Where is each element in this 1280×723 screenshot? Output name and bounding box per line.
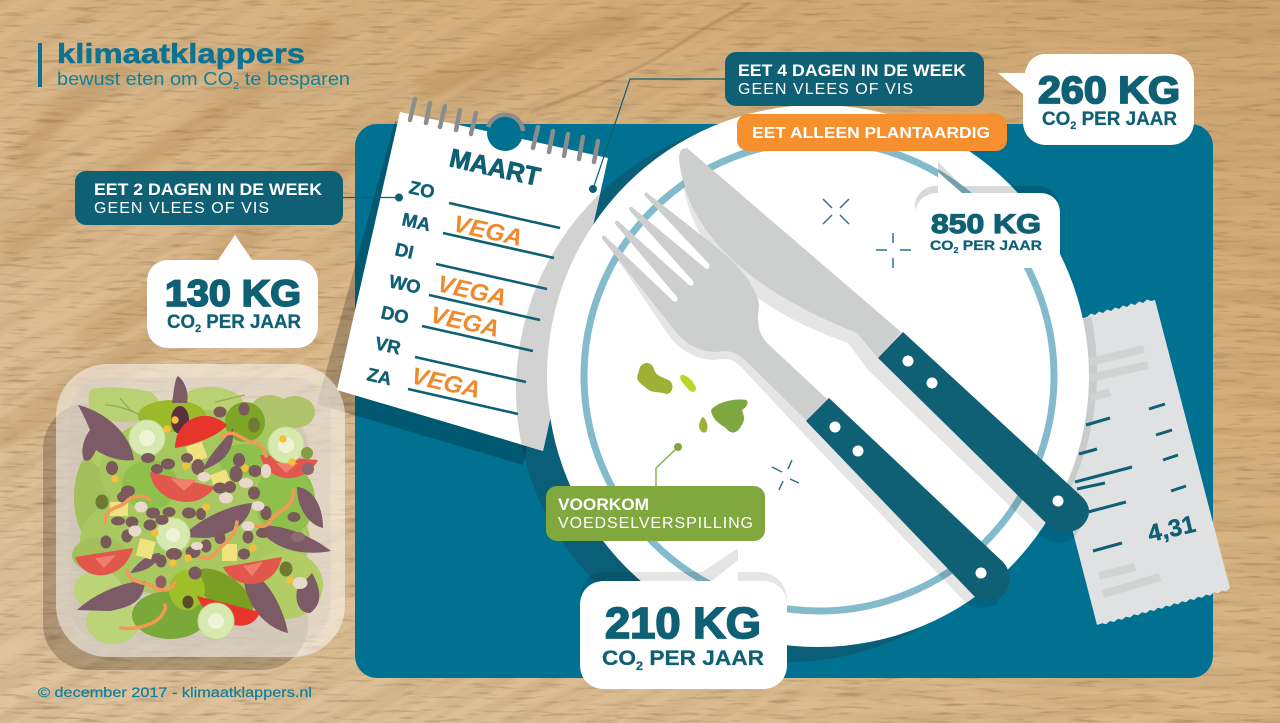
calendar lines: [408, 203, 560, 414]
label: 4 days: GEEN VLEES OF VIS: [738, 81, 913, 98]
weekday list: DO: [379, 301, 411, 328]
label: food waste: VOORKOM: [558, 496, 649, 514]
container lid highlight: [56, 364, 345, 657]
title: klimaatklappers: [57, 38, 305, 69]
tomato flesh detail: [95, 463, 298, 576]
vega notes: VEGA: [409, 362, 483, 404]
callout: 210 kg: PER JAAR: [643, 646, 764, 670]
weekday list: WO: [387, 270, 423, 298]
callout: 850 kg: CO: [930, 237, 951, 253]
tomatoes: [75, 416, 318, 626]
vega notes: VEGA: [435, 270, 509, 312]
callout: 130 kg: 130 KG: [165, 273, 301, 314]
corn: [111, 416, 296, 584]
label: food waste: VOEDSELVERSPILLING: [558, 515, 753, 532]
callout: 260 kg: CO: [1042, 109, 1070, 130]
callout: 850 kg: 850 KG: [931, 209, 1041, 239]
white beans: [128, 464, 308, 589]
cucumber seeds: [139, 430, 294, 629]
knife handle: [878, 332, 1089, 532]
beans: [96, 402, 314, 608]
callout: 210 kg: [580, 548, 787, 689]
fork handle: [806, 398, 1010, 601]
weekday list: MA: [400, 208, 433, 235]
subtitle: bewust eten om CO: [57, 69, 216, 89]
avocado cubes: [110, 441, 237, 561]
weekday list: ZO: [407, 176, 437, 202]
receipt total: 4,31: [1145, 511, 1198, 548]
knife: [679, 148, 1089, 532]
callout: 130 kg: [147, 235, 318, 348]
label: plant based: EET ALLEEN PLANTAARDIG: [752, 125, 990, 142]
footer credit: © december 2017 - klimaatklappers.nl: [38, 684, 312, 700]
vega notes: VEGA: [451, 210, 525, 252]
leaf veins: [105, 395, 245, 420]
weekday list: [365, 176, 437, 389]
plate shadow on placemat: [522, 134, 924, 662]
callout: 260 kg: PER JAAR: [1076, 109, 1177, 130]
callout: 130 kg: PER JAAR: [201, 312, 301, 333]
carrot strands: [105, 433, 293, 628]
callout: 130 kg: 2: [195, 323, 201, 335]
callout: 260 kg: [998, 54, 1194, 145]
callout: 210 kg: 210 KG: [605, 599, 761, 648]
food leftovers: [637, 363, 748, 433]
label: 2 days: GEEN VLEES OF VIS: [94, 200, 269, 217]
salad: [72, 376, 331, 644]
vega notes: VEGA: [428, 301, 502, 343]
label: food waste: [546, 443, 765, 541]
plate: [547, 105, 1089, 647]
basil leaves: [77, 376, 331, 633]
callout: 850 kg: 2: [953, 246, 959, 255]
label: 4 days: [589, 52, 984, 193]
weekday list: ZA: [365, 363, 394, 389]
label: 4 days: EET 4 DAGEN IN DE WEEK: [738, 62, 966, 80]
subtitle: 2: [233, 81, 240, 92]
callout: 130 kg: CO: [167, 312, 196, 333]
calendar: [337, 96, 608, 451]
label: 2 days: [75, 171, 403, 225]
salad bowl shadow: [43, 403, 308, 670]
month heading: MAART: [447, 143, 543, 192]
fork shadow: [603, 238, 1003, 608]
weekday list: VR: [373, 332, 403, 358]
label: plant based: [737, 114, 1007, 151]
subtitle: te besparen: [239, 69, 350, 89]
sparkles: [772, 199, 911, 490]
salad container: [56, 364, 345, 657]
calendar hole: [487, 115, 523, 151]
fork: [602, 192, 1010, 601]
heading: [38, 38, 350, 92]
lettuce: [72, 387, 323, 644]
callout: 260 kg: 2: [1070, 120, 1076, 132]
receipt: [1067, 300, 1230, 625]
knife shadow: [681, 148, 1080, 542]
callout: 210 kg: CO: [602, 646, 634, 670]
calendar drop shadow: [317, 121, 588, 465]
vega notes: [409, 210, 525, 404]
callout: 260 kg: 260 KG: [1038, 70, 1180, 112]
weekday list: DI: [393, 238, 416, 263]
callout: 850 kg: [915, 162, 1060, 268]
cucumbers: [129, 420, 304, 639]
spiral binding: [410, 99, 598, 162]
callout: 850 kg: PER JAAR: [958, 237, 1042, 253]
panel: blue placemat: [355, 124, 1213, 678]
callout: 210 kg: 2: [636, 659, 643, 673]
label: 2 days: EET 2 DAGEN IN DE WEEK: [94, 181, 322, 199]
